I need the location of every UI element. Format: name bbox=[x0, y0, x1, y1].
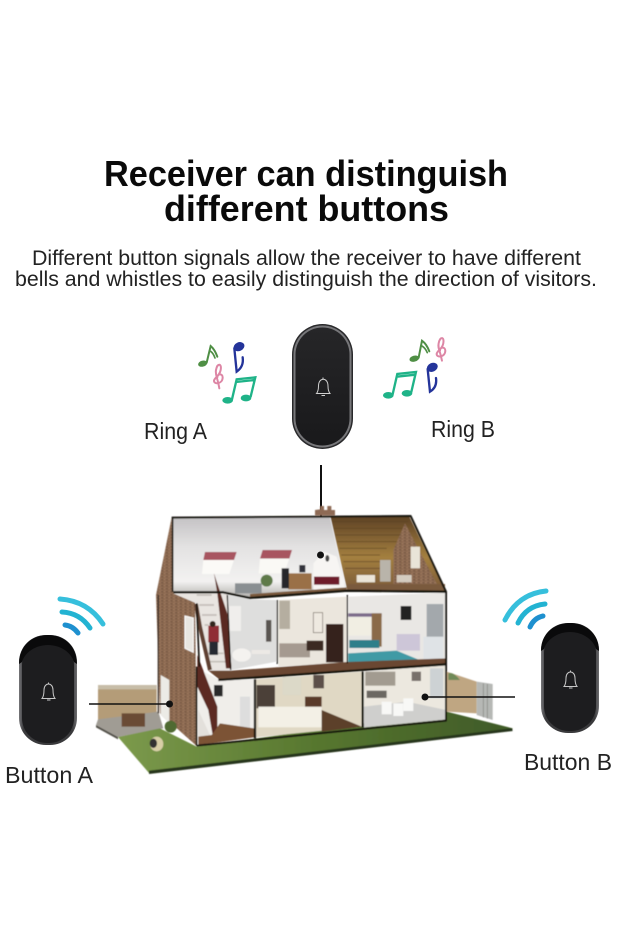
icon: music notes right bbox=[383, 338, 445, 399]
kitchen bbox=[364, 665, 446, 727]
label: Button A: Button A bbox=[5, 762, 94, 788]
label: Ring A: Ring A bbox=[144, 418, 208, 444]
first floor bathroom bbox=[228, 595, 277, 670]
icon: bell bbox=[564, 670, 577, 688]
plant and dog bbox=[150, 721, 177, 751]
brick side wall bbox=[156, 517, 197, 746]
button A device bbox=[19, 635, 77, 745]
living room bbox=[256, 672, 362, 737]
connector dot: button B bbox=[422, 694, 428, 700]
first floor stair hall bbox=[173, 573, 232, 671]
attic left room bbox=[173, 517, 347, 597]
fence right bbox=[447, 672, 493, 720]
house frame outlines bbox=[158, 516, 446, 746]
attic right room bbox=[331, 517, 445, 591]
description text: Different button signals allow the receiver to have different bbox=[32, 247, 581, 270]
house cutaway illustration bbox=[96, 506, 513, 774]
first floor slab bbox=[208, 658, 446, 680]
label: Button B: Button B bbox=[524, 749, 612, 775]
title bbox=[104, 153, 508, 229]
description text bbox=[15, 247, 597, 291]
icon: wifi signal B bbox=[505, 591, 546, 627]
connector dot: button A bbox=[166, 700, 173, 708]
title: Receiver can distinguish bbox=[104, 153, 508, 194]
first floor kids room bbox=[348, 593, 445, 663]
icon: music notes left bbox=[197, 340, 255, 404]
description text: bells and whistles to easily distinguish the direction of visitors. bbox=[15, 268, 597, 291]
title: different buttons bbox=[164, 188, 449, 229]
icon: wifi signal A bbox=[60, 599, 103, 633]
first floor bedroom bbox=[278, 597, 347, 667]
icon: bell bbox=[42, 682, 55, 700]
receiver dot in attic bbox=[317, 552, 324, 558]
receiver device bbox=[292, 324, 353, 449]
connector line: button B bbox=[425, 696, 515, 698]
label: Ring B: Ring B bbox=[431, 416, 495, 442]
chimney bbox=[315, 506, 335, 515]
lawn bbox=[118, 712, 513, 773]
ground floor stair hall bbox=[197, 655, 255, 745]
connector line: button A bbox=[89, 703, 169, 705]
button B device bbox=[541, 623, 599, 733]
side door bbox=[161, 675, 169, 723]
icon: bell bbox=[316, 378, 330, 396]
connector line: receiver bbox=[320, 465, 322, 553]
patio fence left bbox=[96, 685, 163, 739]
